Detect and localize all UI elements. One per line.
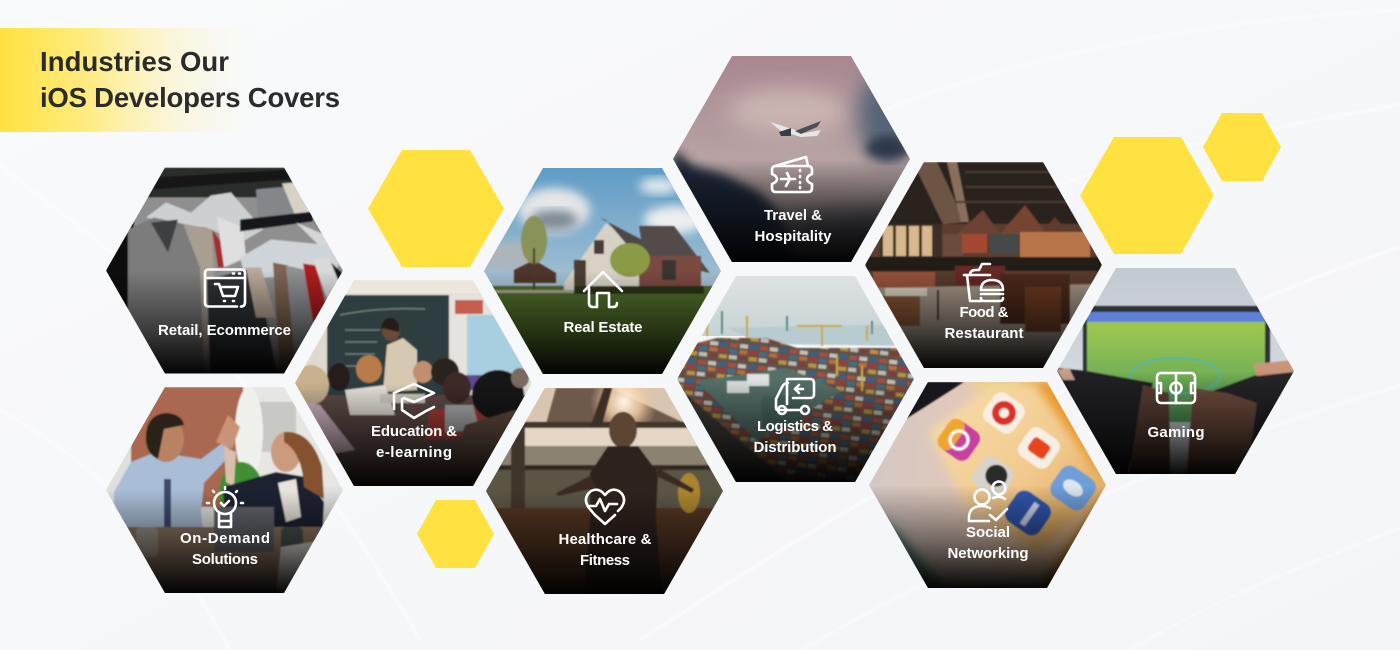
label: Education & xyxy=(371,423,457,440)
icon: people with check xyxy=(969,482,1007,521)
photo: meditation at sunset xyxy=(486,366,723,594)
photo: house xyxy=(479,168,721,374)
icon: light bulb with check xyxy=(207,487,243,527)
title xyxy=(40,46,340,113)
panel: Education & e-learning xyxy=(293,280,532,486)
label: Real Estate xyxy=(564,319,642,336)
icon: house xyxy=(584,272,622,307)
panel: Logistics & Distribution: Distribution xyxy=(754,439,836,456)
panel: Healthcare & Fitness xyxy=(486,366,723,594)
panel: Travel & Hospitality: Hospitality xyxy=(754,228,832,245)
icon: drink and burger xyxy=(964,264,1003,301)
icon: graduation cap xyxy=(394,384,434,418)
panel: On-Demand Solutions xyxy=(106,387,343,593)
label: Travel & xyxy=(764,207,822,224)
panel: Real Estate xyxy=(479,168,721,374)
panel: Social Networking: Networking xyxy=(948,545,1028,562)
panel: Travel & Hospitality xyxy=(673,56,918,262)
icon: football pitch xyxy=(1157,373,1195,403)
title: Industries Our xyxy=(40,46,229,77)
title: iOS Developers Covers xyxy=(40,82,340,113)
photo: clothes rack xyxy=(106,168,343,374)
airplane xyxy=(770,121,821,137)
photo: container port xyxy=(677,276,914,482)
panel: Social Networking xyxy=(869,382,1107,588)
photo: classroom xyxy=(293,280,532,486)
icon: plane ticket xyxy=(772,157,812,192)
panel: Food & Restaurant xyxy=(865,162,1102,368)
panel: Education & e-learning: e-learning xyxy=(376,444,452,461)
header banner xyxy=(0,28,340,132)
photo: restaurant interior xyxy=(865,162,1102,368)
label: Food & xyxy=(960,304,1009,321)
photo: game controllers and TV xyxy=(1057,268,1294,474)
icon: truck with arrows xyxy=(776,379,814,414)
icon: browser with shopping cart xyxy=(205,270,245,306)
photo: phone social apps xyxy=(869,382,1107,588)
yellow hexagons xyxy=(368,113,1281,568)
photo: airplane in clouds xyxy=(673,56,918,262)
panel: Food & Restaurant: Restaurant xyxy=(944,325,1024,342)
panel: Retail, Ecommerce xyxy=(106,168,343,374)
photo: colleagues high five xyxy=(106,387,343,593)
panel: On-Demand Solutions: Solutions xyxy=(192,551,258,568)
label: Retail, Ecommerce xyxy=(158,322,291,339)
panel: Healthcare & Fitness: Fitness xyxy=(580,552,630,569)
label: On-Demand xyxy=(180,530,270,547)
label: Social xyxy=(966,524,1010,541)
panel: Logistics & Distribution xyxy=(677,276,914,482)
label: Logistics & xyxy=(757,418,833,435)
panel: Gaming xyxy=(1057,268,1294,474)
icon: heart with pulse xyxy=(586,490,624,524)
label: Healthcare & xyxy=(558,531,652,548)
label: Gaming xyxy=(1148,424,1204,441)
